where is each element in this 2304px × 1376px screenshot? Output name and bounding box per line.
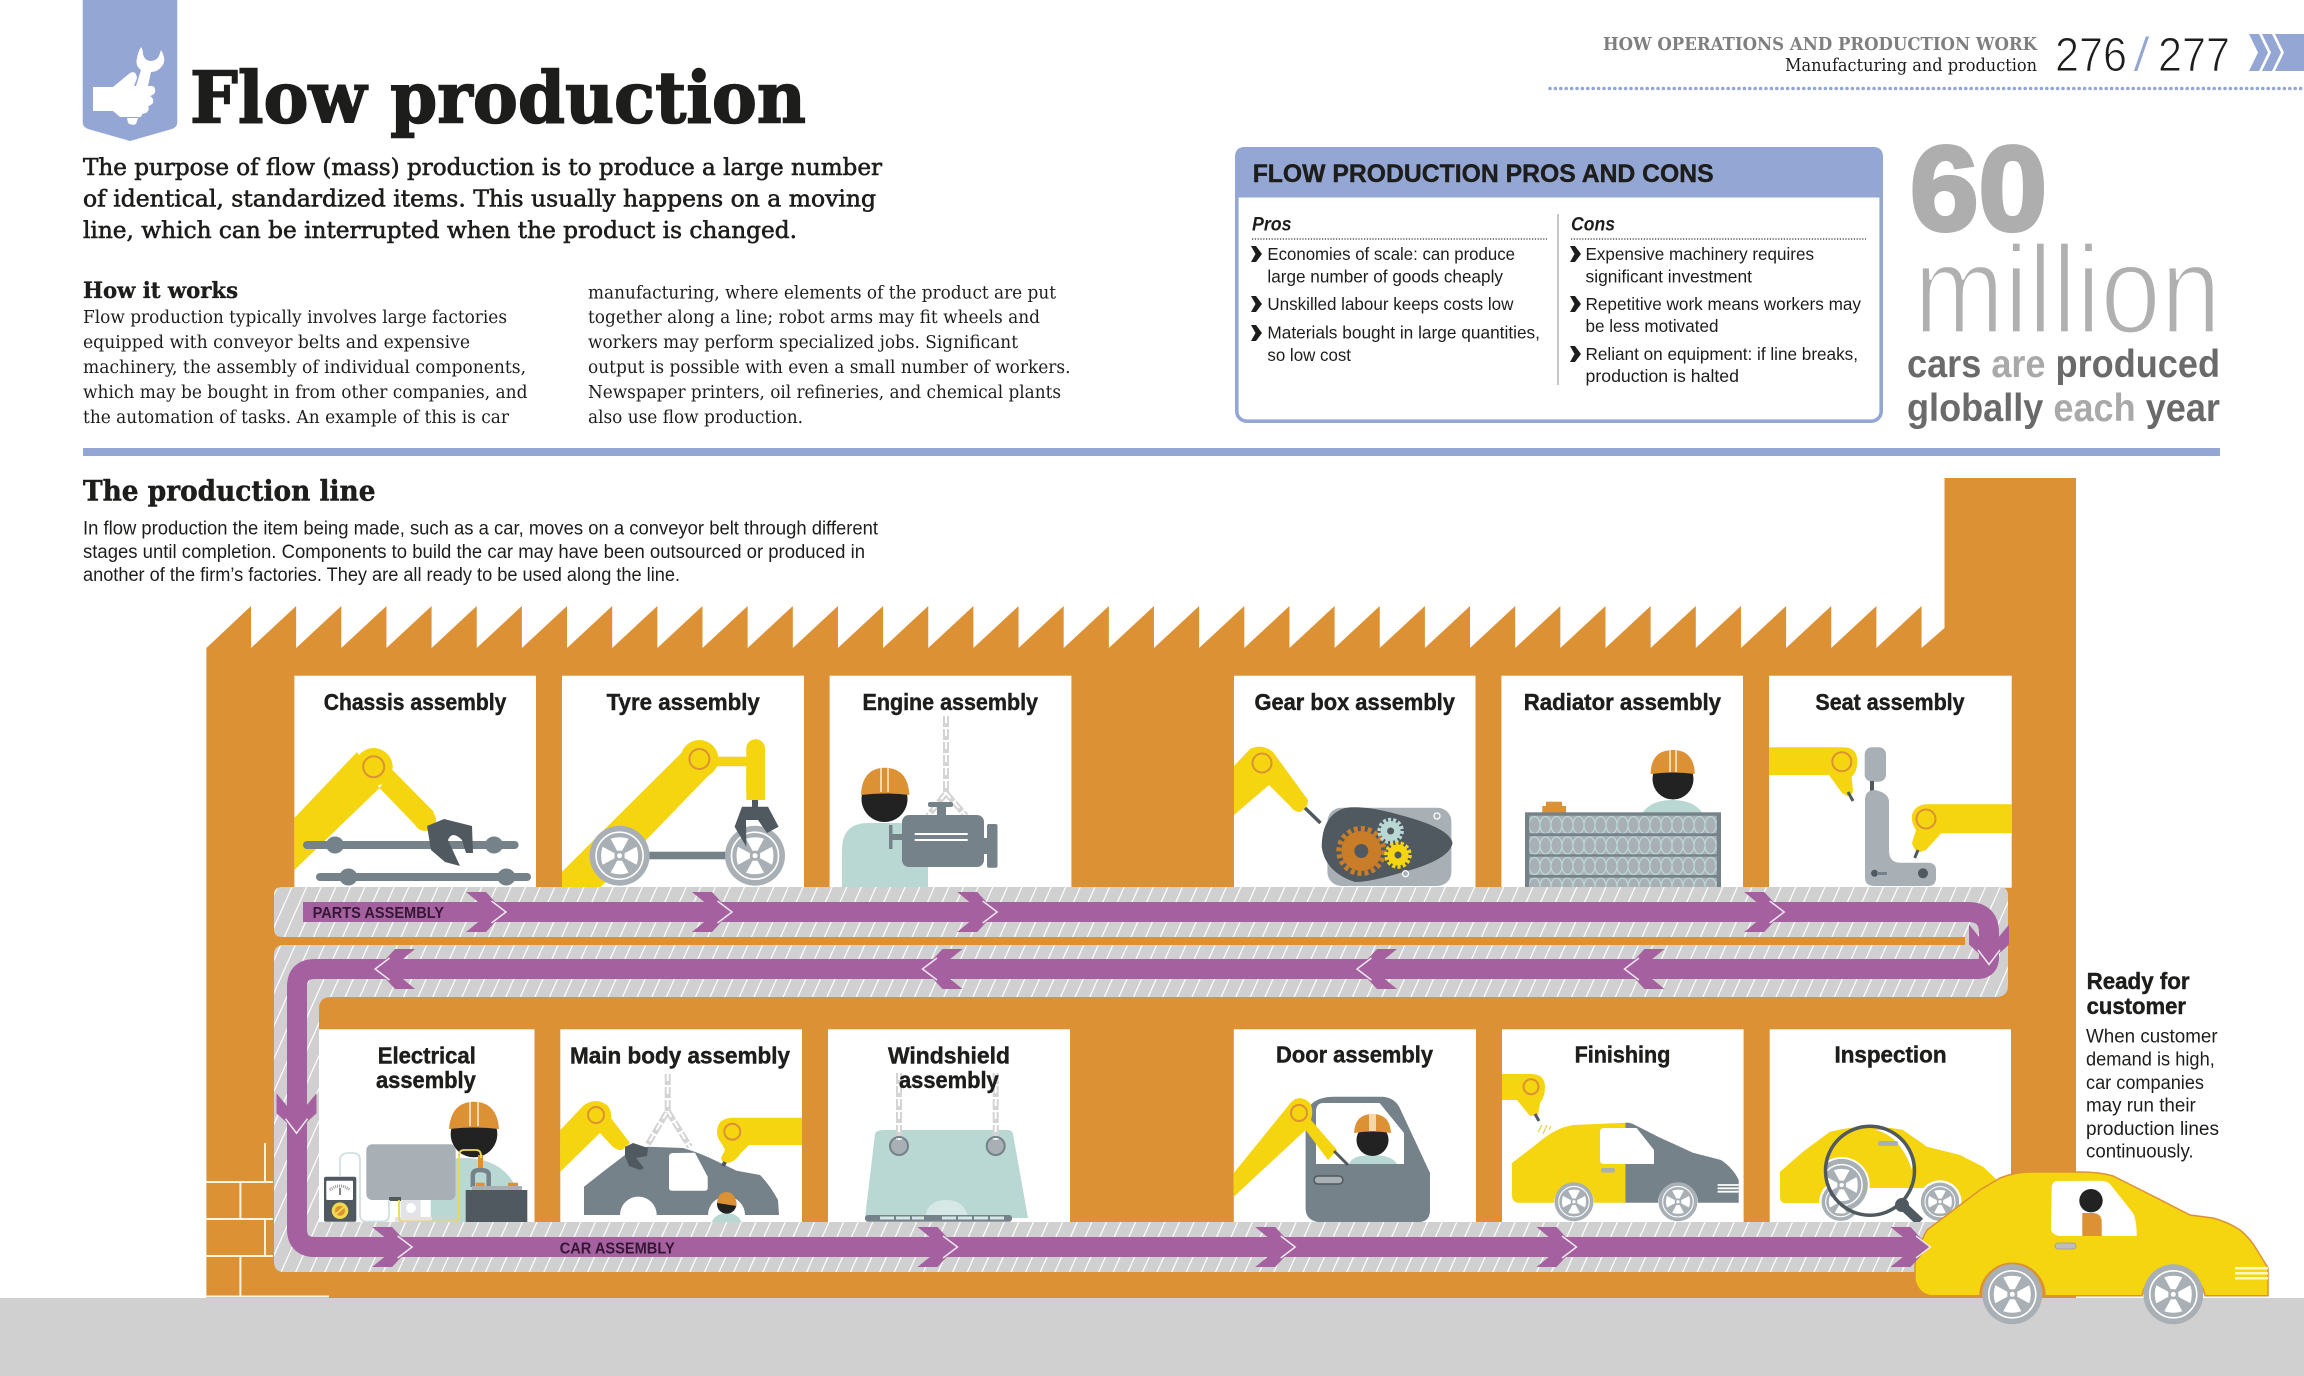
worker under car <box>712 1192 742 1222</box>
pros column: so low cost <box>1267 345 1351 365</box>
factory building <box>206 478 2076 1298</box>
chassis rails <box>303 836 531 886</box>
panel: chassis assembly <box>294 676 536 888</box>
label: assembly <box>899 1067 999 1093</box>
how it works: column one: How it works <box>83 278 238 304</box>
wheels and axle <box>590 826 785 886</box>
gripper <box>427 819 473 866</box>
how it works: column one: the automation of tasks. An example of this is car <box>83 408 510 428</box>
how it works: column one: Flow production typically involves large factories <box>83 308 507 328</box>
label: Tyre assembly <box>607 689 760 715</box>
gripper <box>735 800 779 847</box>
how it works: column two: also use flow production. <box>588 408 803 428</box>
robot arm <box>1234 747 1320 823</box>
robot arm <box>562 739 765 888</box>
label: Windshield <box>888 1042 1010 1068</box>
brick wall detail <box>206 1143 329 1296</box>
label: assembly <box>376 1067 476 1093</box>
running header: Manufacturing and production <box>1785 55 2037 76</box>
seat <box>1865 747 1936 886</box>
pros column: Economies of scale: can produce <box>1267 244 1515 264</box>
callout: ready for customer: When customer <box>2086 1027 2218 1048</box>
lower robot arm <box>1912 804 2012 858</box>
how it works: column one: equipped with conveyor belts and expensive <box>83 333 470 353</box>
panel: gear box assembly <box>1234 676 1476 888</box>
page numbers <box>2055 29 2230 82</box>
title: Flow production <box>190 56 806 140</box>
how it works: column two: Newspaper printers, oil refineries, and chemical plants <box>588 383 1061 403</box>
car under inspection <box>1780 1127 1997 1223</box>
car window <box>669 1153 708 1191</box>
how it works: column two: together along a line; robot arms may fit wheels and <box>588 308 1040 328</box>
how it works: column two <box>588 284 1070 428</box>
cons column: be less motivated <box>1586 316 1718 336</box>
how it works: column two: workers may perform specialized jobs. Significant <box>588 333 1019 353</box>
production line heading: The production line <box>83 474 376 508</box>
spray arm <box>1502 1074 1551 1134</box>
flow arrow: parts assembly band <box>303 892 1989 950</box>
chains <box>899 1073 996 1140</box>
teal gear <box>1379 820 1402 842</box>
multimeter <box>324 1177 356 1222</box>
production line description <box>83 519 879 586</box>
label: Inspection <box>1834 1042 1946 1068</box>
panel: electrical assembly <box>319 1029 534 1222</box>
pros column: Pros <box>1252 214 1292 235</box>
worker <box>1642 750 1703 814</box>
chevrons <box>2249 34 2304 71</box>
section icon: bookmark with hand holding wrench <box>83 0 177 141</box>
pros and cons heading: FLOW PRODUCTION PROS AND CONS <box>1253 160 1714 188</box>
ground <box>0 1298 2304 1376</box>
final arrow head into car <box>1890 1227 1930 1267</box>
parts assembly label: PARTS ASSEMBLY <box>313 905 444 922</box>
callout: ready for customer: demand is high, <box>2086 1050 2215 1071</box>
cons column: production is halted <box>1586 366 1739 386</box>
right robot arm <box>717 1118 802 1166</box>
radiator <box>1525 802 1721 888</box>
label <box>888 1042 1010 1093</box>
running header: HOW OPERATIONS AND PRODUCTION WORK <box>1603 34 2038 55</box>
cons column: significant investment <box>1586 266 1752 286</box>
windshield <box>865 1130 1028 1222</box>
cons column: Repetitive work means workers may <box>1586 294 1861 314</box>
cons column: Cons <box>1571 214 1615 235</box>
how it works: column one: which may be bought in from other companies, and <box>83 383 528 403</box>
label: Engine assembly <box>862 689 1038 715</box>
car half painted <box>1512 1123 1739 1221</box>
panel: finishing <box>1502 1029 1744 1222</box>
statistic: 60 million cars: 60 <box>1910 122 2047 256</box>
yellow gear <box>1386 843 1410 867</box>
finished yellow car <box>1915 1172 2268 1324</box>
callout: ready for customer: production lines <box>2086 1119 2219 1140</box>
panel: seat assembly <box>1769 676 2012 888</box>
orange gear <box>1339 828 1384 874</box>
label: Seat assembly <box>1815 689 1965 715</box>
intro text: The purpose of flow (mass) production is to produce a large number <box>83 155 882 181</box>
intro text: of identical, standardized items. This usually happens on a moving <box>83 186 876 212</box>
chain <box>928 716 966 816</box>
panel: tyre assembly <box>562 676 804 888</box>
statistic: 60 million cars: globally each year <box>1907 387 2220 430</box>
flow arrow: return band and car assembly band <box>276 924 2009 1267</box>
label: Chassis assembly <box>324 689 506 715</box>
car body <box>584 1147 779 1215</box>
label: Radiator assembly <box>1524 689 1721 715</box>
callout: ready for customer: customer <box>2087 993 2186 1019</box>
label: Gear box assembly <box>1254 689 1455 715</box>
chain <box>648 1074 690 1147</box>
worker <box>1349 1114 1397 1164</box>
cons column <box>1570 214 1866 386</box>
upper robot arm <box>1769 747 1857 801</box>
worker <box>842 768 928 888</box>
label: Electrical <box>378 1042 476 1068</box>
pros column: Unskilled labour keeps costs low <box>1267 294 1514 314</box>
production line description: another of the firm’s factories. They are all ready to be used along the line. <box>83 565 680 586</box>
panel: radiator assembly <box>1501 676 1743 888</box>
callout: ready for customer: Ready for <box>2087 968 2190 994</box>
page numbers: / <box>2133 29 2151 82</box>
battery <box>466 1155 527 1222</box>
gear box <box>1322 807 1452 886</box>
label <box>376 1042 476 1093</box>
callout: ready for customer: continuously. <box>2086 1142 2194 1163</box>
wires <box>340 1150 481 1222</box>
how it works: column one: machinery, the assembly of individual components, <box>83 358 526 378</box>
panel: inspection <box>1770 1029 2011 1223</box>
pros column: Materials bought in large quantities, <box>1267 323 1540 343</box>
panel: pros and cons <box>1235 147 1883 421</box>
panel: engine assembly <box>830 676 1071 888</box>
statistic: 60 million cars <box>1907 122 2221 430</box>
callout: ready for customer <box>2086 968 2219 1163</box>
computer monitor <box>366 1144 456 1222</box>
worker <box>431 1102 516 1222</box>
label: Door assembly <box>1276 1042 1433 1068</box>
page numbers: 276 <box>2055 29 2127 82</box>
cons column: Reliant on equipment: if line breaks, <box>1586 344 1858 364</box>
callout: ready for customer: car companies <box>2086 1073 2204 1094</box>
panel: main body assembly <box>560 1029 802 1222</box>
production line description: stages until completion. Components to build the car may have been outsourced or produced in <box>83 542 865 563</box>
how it works: column two: output is possible with even a small number of workers. <box>588 358 1070 378</box>
callout: ready for customer: may run their <box>2086 1096 2196 1117</box>
statistic: 60 million cars: cars are produced <box>1907 343 2220 386</box>
window and driver <box>2051 1181 2137 1236</box>
robot arm <box>294 748 436 870</box>
magnifying glass <box>1814 1125 1920 1222</box>
how it works: column two: manufacturing, where elements of the product are put <box>588 284 1057 304</box>
pros column <box>1251 214 1547 365</box>
page numbers: 277 <box>2158 29 2230 82</box>
panel: door assembly <box>1234 1029 1476 1222</box>
panel: windshield assembly <box>828 1029 1070 1222</box>
left robot arm <box>560 1101 630 1172</box>
production line description: In flow production the item being made, such as a car, moves on a conveyor belt through different <box>83 519 879 540</box>
running header <box>1603 34 2038 76</box>
intro text: line, which can be interrupted when the product is changed. <box>83 218 797 244</box>
gripper <box>625 1143 648 1170</box>
cons column: Expensive machinery requires <box>1586 244 1814 264</box>
how it works: column one <box>83 278 528 428</box>
door <box>1306 1097 1430 1222</box>
label: Finishing <box>1575 1042 1670 1068</box>
label: Main body assembly <box>570 1042 790 1068</box>
statistic: 60 million cars: million <box>1914 221 2221 360</box>
car assembly label: CAR ASSEMBLY <box>560 1240 675 1257</box>
intro text <box>83 155 882 244</box>
pros column: large number of goods cheaply <box>1267 266 1503 286</box>
engine <box>889 802 998 868</box>
robot arm <box>1234 1098 1348 1197</box>
conveyor belt <box>274 887 2008 1272</box>
